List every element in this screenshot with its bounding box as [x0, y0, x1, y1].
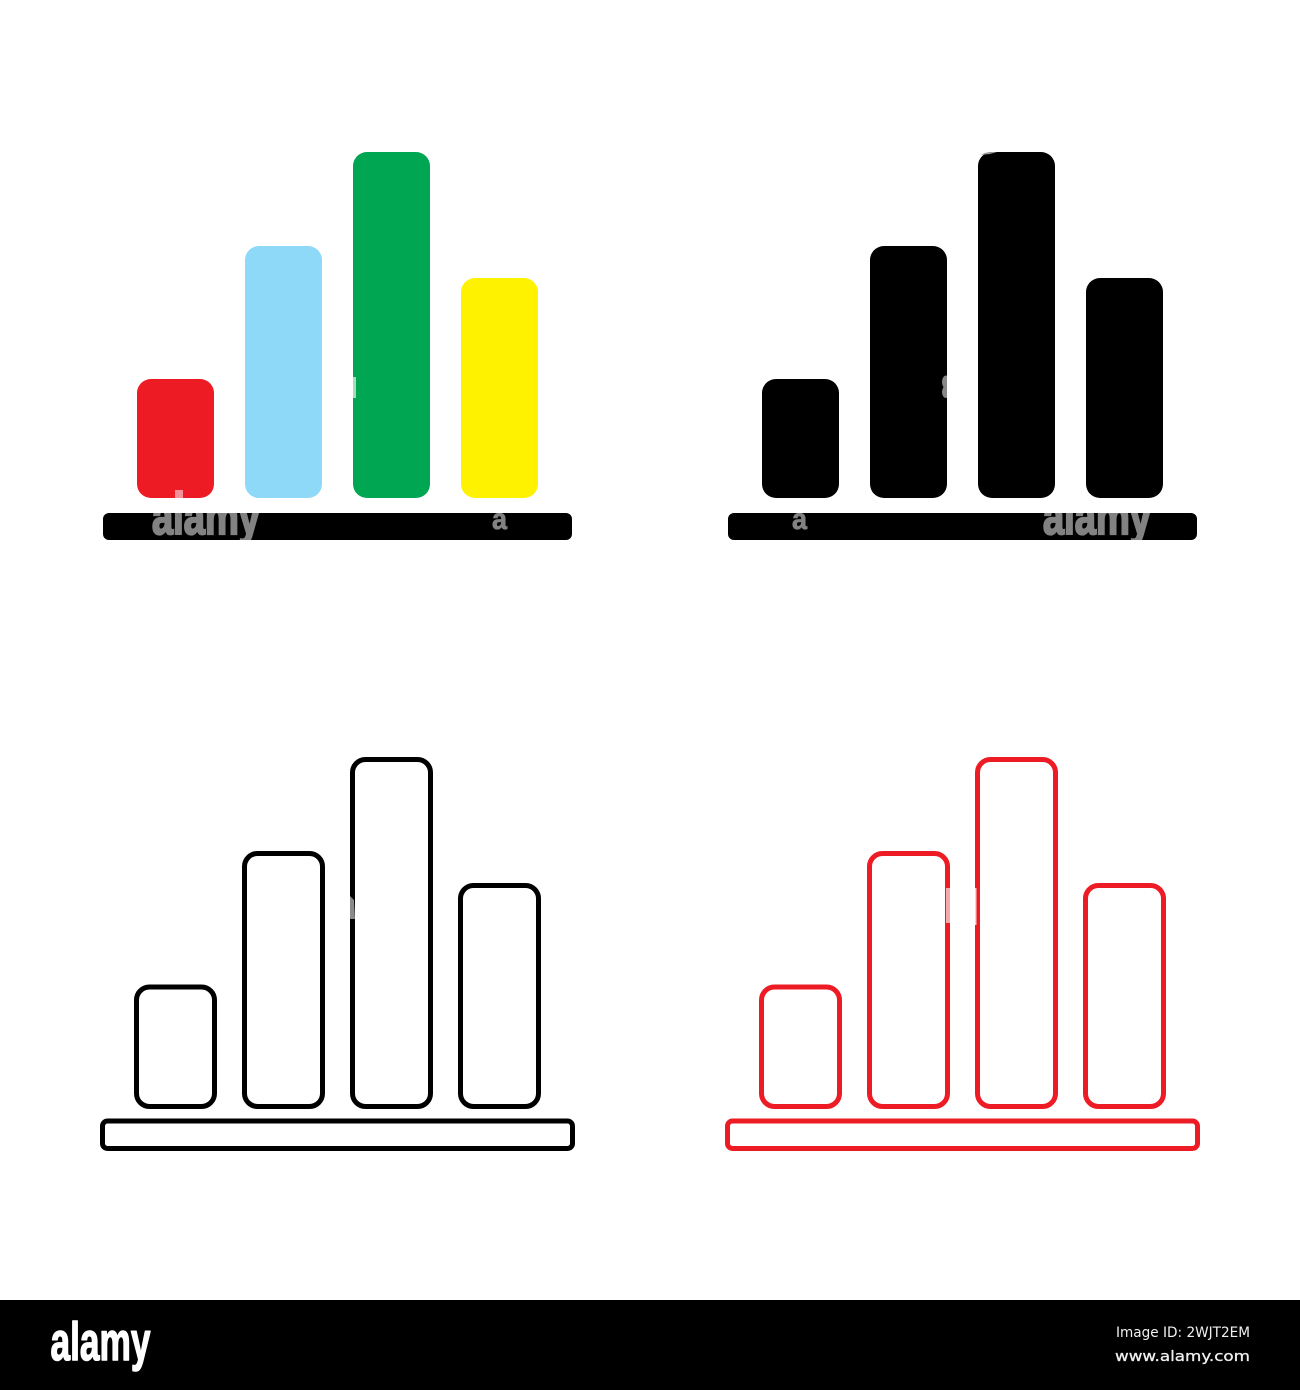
watermark on base: small letter: a — [492, 503, 507, 536]
icon: black outline bar chart — [102, 760, 572, 1148]
footer logo: alamy — [50, 1312, 150, 1372]
website: www.alamy.com — [1115, 1349, 1250, 1365]
icon: coloured bar chart — [103, 152, 572, 545]
watermark on base: large: alamy — [1043, 489, 1151, 545]
icon: solid black bar chart — [728, 152, 1197, 545]
watermark on base: large: alamy — [152, 489, 260, 545]
watermark on base: small letter: a — [792, 503, 807, 536]
icon: red outline bar chart — [728, 760, 1198, 1148]
footer bar — [0, 1300, 1300, 1390]
image ID: Image ID: 2WJT2EM — [1116, 1325, 1250, 1341]
